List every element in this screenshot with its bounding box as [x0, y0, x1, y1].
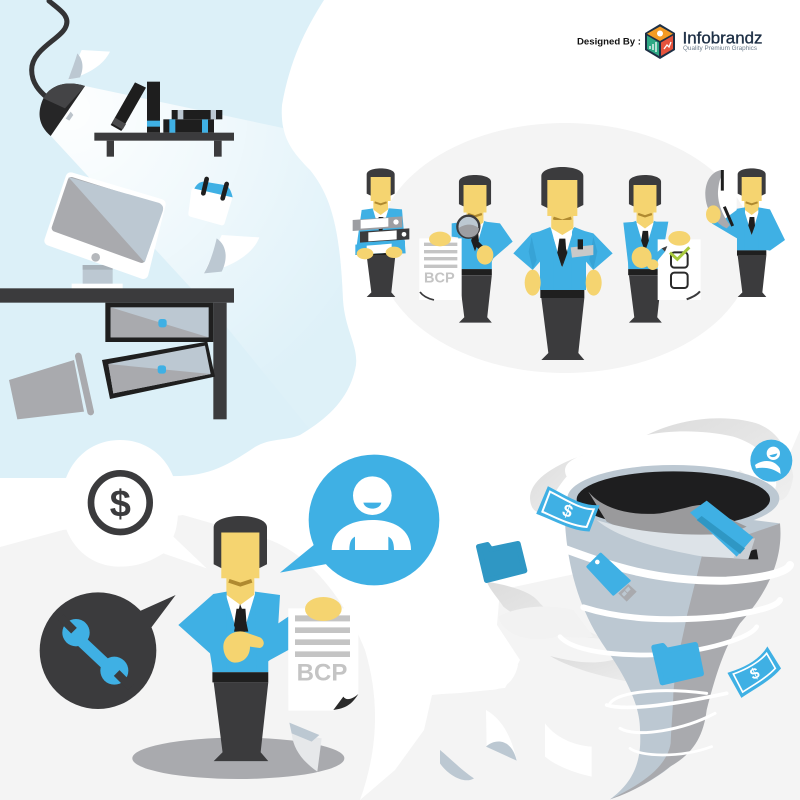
white cloud patch [420, 575, 518, 695]
flying paper top [68, 50, 110, 80]
BCP sheet small [419, 238, 462, 300]
money bill top [537, 487, 598, 531]
ground shadow [132, 738, 344, 779]
grey floor left [0, 515, 375, 800]
folder dark [479, 544, 525, 580]
money bill right [729, 648, 780, 697]
top drawer [105, 303, 213, 342]
central person with badge [513, 167, 613, 360]
white spiral bands [560, 549, 790, 755]
desk [0, 288, 234, 419]
folder light [654, 645, 701, 683]
flying paper middle [204, 235, 259, 273]
tornado [440, 418, 793, 799]
person with binders [353, 168, 409, 297]
presenter with BCP document [132, 516, 358, 779]
id badge [571, 239, 593, 258]
pencil [653, 248, 665, 262]
team of five [353, 167, 785, 360]
pointing hand [223, 631, 264, 663]
calendar [191, 179, 233, 223]
person with magnifier and BCP sheet [419, 175, 513, 323]
designer credit [577, 24, 762, 59]
curled paper on floor [289, 723, 322, 772]
office scene [0, 1, 259, 419]
fallen drawer [102, 342, 215, 399]
person on phone [705, 168, 785, 297]
person with checklist [623, 175, 701, 323]
monitor [49, 177, 163, 289]
blue room background [0, 0, 356, 478]
funnel mouth [567, 465, 779, 559]
avatar badge [750, 440, 792, 482]
waste bin [9, 356, 91, 419]
money bill right: $ [748, 664, 763, 684]
logo icon [645, 24, 675, 59]
binders [353, 216, 409, 255]
phone handset [705, 170, 737, 228]
dollar coin [91, 473, 150, 532]
team ellipse backdrop [377, 123, 753, 373]
dollar bubble [62, 440, 207, 568]
designer credit: Designed By : [577, 36, 641, 46]
BCP document [288, 608, 358, 711]
scattered papers [440, 710, 592, 780]
shelf with books [94, 82, 234, 157]
person icon [332, 476, 411, 550]
logo tagline: Quality Premium Graphics [683, 46, 757, 52]
lamp light beam [50, 86, 356, 430]
blue person bubble [280, 455, 439, 585]
funnel right [610, 523, 780, 799]
logo wordmark: Infobrandz [682, 30, 762, 48]
funnel left [565, 510, 780, 799]
dollar coin: $ [110, 483, 131, 525]
usb drive [588, 554, 637, 602]
checklist [658, 239, 701, 300]
magnifier [457, 216, 482, 248]
BCP sheet small: BCP [424, 271, 455, 287]
wind swirls [487, 418, 793, 687]
wrench icon [61, 617, 131, 687]
wrench bubble [40, 592, 176, 709]
blue pencil [690, 501, 753, 557]
lamp [32, 1, 85, 136]
grey floor right [360, 430, 800, 800]
money bill top: $ [560, 500, 576, 522]
BCP document: BCP [297, 660, 347, 687]
